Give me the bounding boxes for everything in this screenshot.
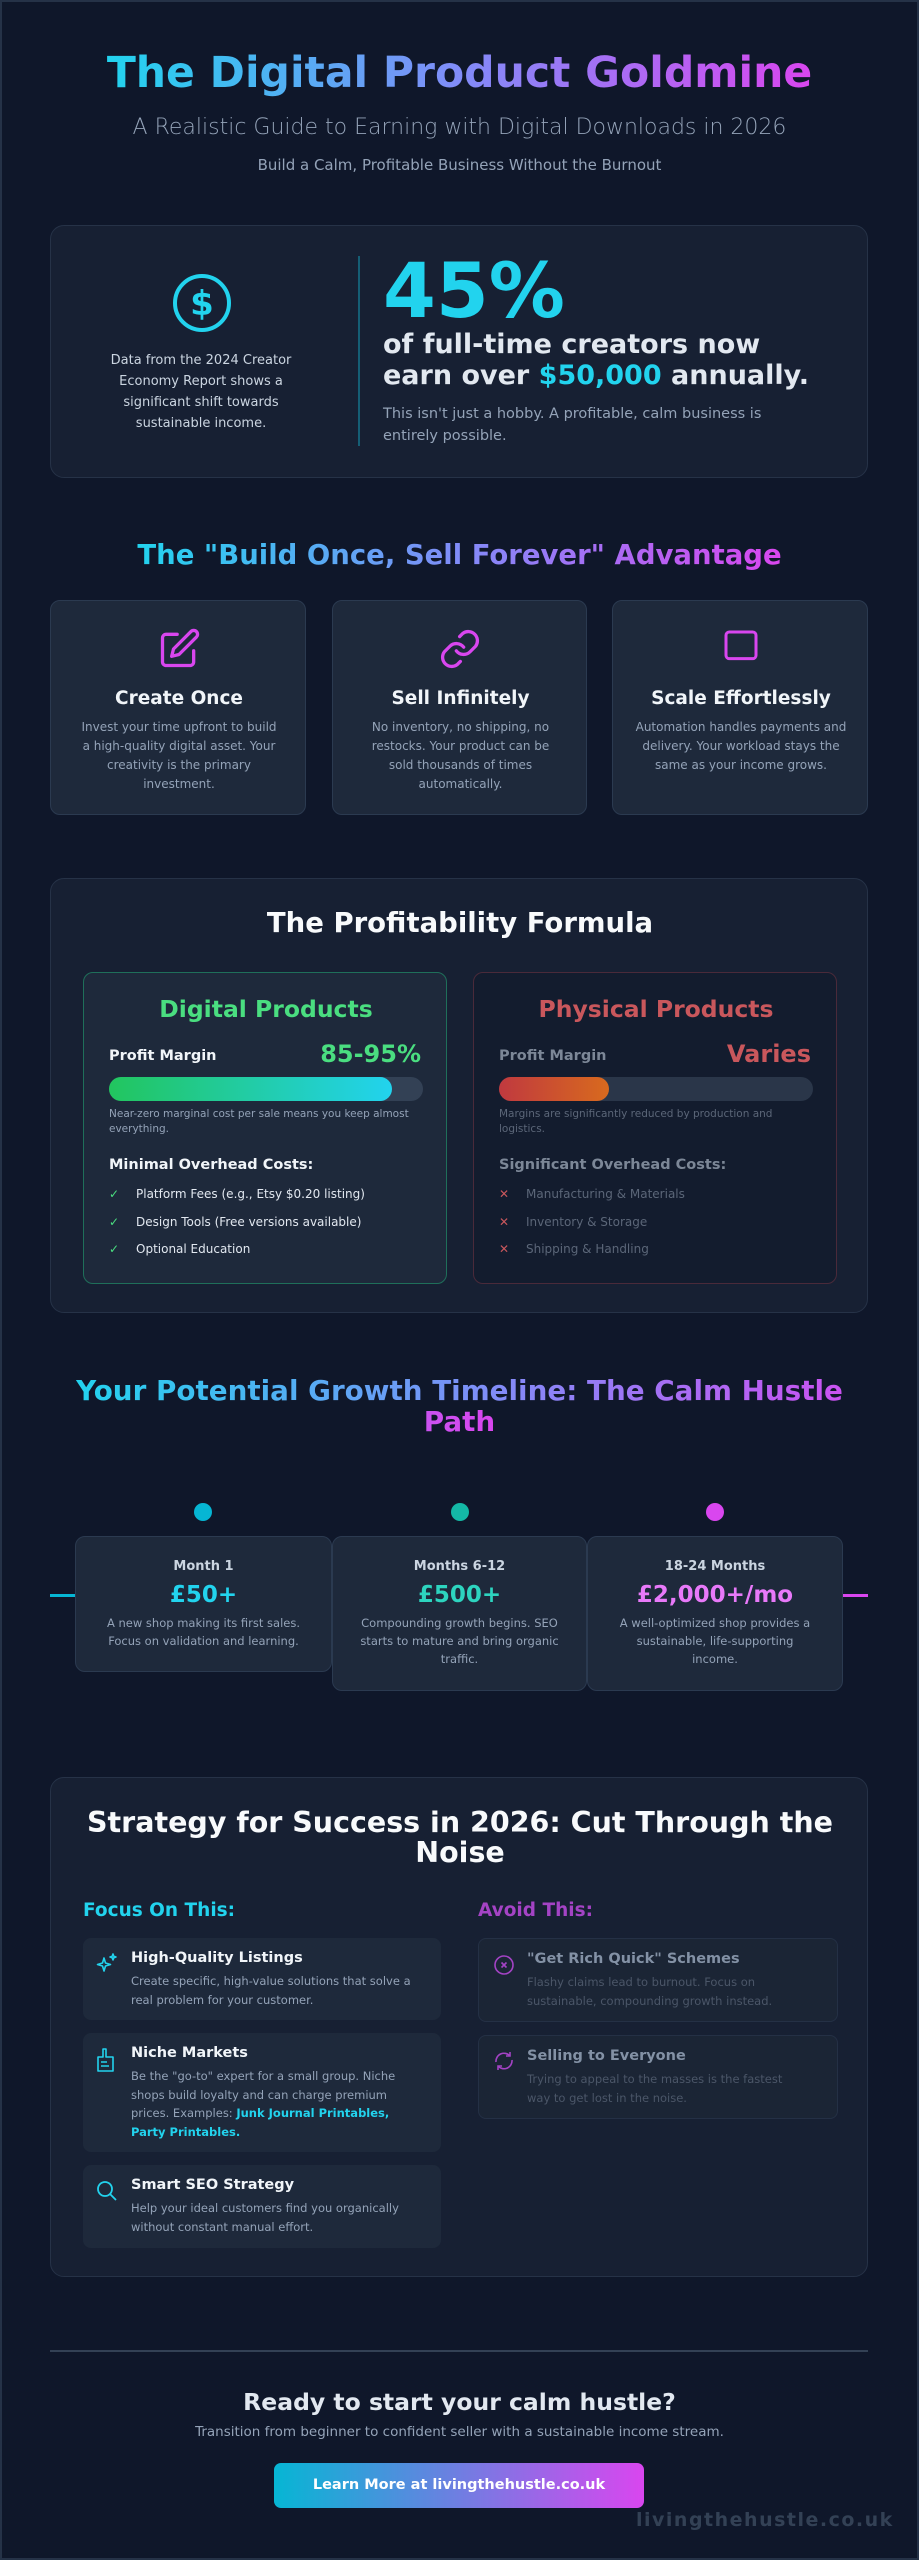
heading: Strategy for Success in 2026: Cut Through the Noise [87,1806,833,1869]
icon: window [724,630,758,660]
box: digital: Minimal Overhead Costs: [109,1157,313,1173]
card: 18-24 months [587,1536,843,1691]
card: month 1: A new shop making its first sales. Focus on validation and learning. [107,1616,300,1648]
card: create once: Create Once [115,688,243,709]
avoid card 1 [478,1938,838,2022]
box: physical: Physical Products [538,995,774,1023]
icon: search [97,2181,117,2201]
button [274,2463,644,2508]
card: 18-24 months: 18-24 Months [665,1559,765,1574]
card: 18-24 months: A well-optimized shop provides a sustainable, life-supporting income. [620,1616,810,1666]
card: scale effortlessly: Scale Effortlessly [651,688,831,709]
list [499,1187,685,1256]
bar [499,1077,813,1101]
focus card 1 [83,1938,441,2020]
bar [109,1077,423,1101]
panel: stat [50,225,868,478]
dot 2 [451,1503,469,1521]
card: months 6-12: Months 6-12 [414,1559,505,1574]
tagline: Build a Calm, Profitable Business Without the Burnout [258,156,661,174]
panel: strategy [50,1777,868,2277]
card: sell infinitely [332,600,587,815]
timeline [50,1503,868,1691]
avoid card 2: way to get lost in the noise. [527,2090,687,2104]
list: Optional Education [136,1242,250,1256]
stat note: This isn't just a hobby. A profitable, calm business is entirely possible. [383,406,761,444]
heading: timeline: Your Potential Growth Timeline: The Calm Hustle Path [76,1374,843,1438]
list: ✕ [499,1187,509,1201]
card: create once: Invest your time upfront to build a high-quality digital asset. Your creativity is the primary investment. [81,720,277,791]
icon: x circle [494,1955,514,1975]
button: Learn More at livingthehustle.co.uk [313,2477,605,2493]
icon: sparkle [96,1953,117,1972]
focus card 1: Create specific, high-value solutions that solve a real problem for your customer. [131,1974,411,2006]
card: sell infinitely: Sell Infinitely [391,688,530,709]
card: sell infinitely: No inventory, no shipping, no restocks. Your product can be sold thousands of times automatically. [372,720,549,791]
focus card 3: Smart SEO Strategy [131,2177,294,2193]
box: physical: Margins are significantly reduced by production and logistics. [499,1108,772,1135]
column heading: focus: Focus On This: [83,1900,235,1921]
focus card 2 [83,2033,441,2152]
focus card 2: shops build loyalty and can charge premium [131,2088,387,2102]
list: ✓ [109,1242,119,1256]
focus card 3 [83,2165,441,2248]
box: digital: Profit Margin [109,1048,217,1064]
focus card 2: Be the "go-to" expert for a small group. Niche [131,2069,395,2083]
card: month 1 [75,1536,332,1672]
card: 18-24 months: £2,000+/mo [637,1582,793,1608]
avoid card 2: Trying to appeal to the masses is the fastest [527,2072,782,2086]
card: months 6-12 [332,1536,587,1691]
box: physical: Significant Overhead Costs: [499,1157,726,1173]
avoid card 2: Selling to Everyone [527,2048,686,2064]
panel: profitability formula [50,878,868,1313]
box: physical [473,972,837,1284]
list: Manufacturing & Materials [526,1187,685,1201]
stat text [383,329,809,391]
dot 3 [706,1503,724,1521]
avoid card 2 [478,2035,838,2119]
watermark: livingthehustle.co.uk [636,2509,894,2531]
icon: cycle [495,2052,513,2070]
focus card 1: High-Quality Listings [131,1950,303,1966]
box: digital: Near-zero marginal cost per sale means you keep almost everything. [109,1108,409,1135]
focus card 2: prices. Examples: Junk Journal Printables, [131,2106,389,2120]
box: digital: Digital Products [159,995,373,1023]
card: scale effortlessly [612,600,868,815]
list: ✓ [109,1187,119,1201]
list [109,1187,365,1256]
icon: dollar [173,274,231,332]
list: Inventory & Storage [526,1214,647,1228]
column heading: avoid: Avoid This: [478,1900,593,1921]
list: Shipping & Handling [526,1242,649,1256]
card: month 1: Month 1 [173,1559,234,1574]
icon: thumb [97,2048,114,2072]
list: ✕ [499,1214,509,1228]
card: scale effortlessly: Automation handles payments and delivery. Your workload stays the same as your income grows. [636,720,846,772]
list: Design Tools (Free versions available) [136,1214,361,1228]
box: physical: Varies [727,1040,811,1068]
heading: build once: The "Build Once, Sell Forever" Advantage [137,539,782,571]
card: months 6-12: Compounding growth begins. SEO starts to mature and bring organic traffic. [360,1616,559,1666]
icon: link [440,630,480,668]
list: ✕ [499,1242,509,1256]
icon: dollar: $ [190,284,214,324]
card: create once [50,600,306,815]
cta heading: Ready to start your calm hustle? [243,2388,676,2416]
heading: The Profitability Formula [267,907,653,939]
stat text: of full-time creators now [383,329,760,360]
divider [50,2350,868,2352]
title: The Digital Product Goldmine [107,49,812,98]
focus card 3: Help your ideal customers find you organically without constant manual effort. [131,2201,399,2234]
list: ✓ [109,1214,119,1228]
source text: Data from the 2024 Creator Economy Report shows a significant shift towards sustainable income. [111,353,291,431]
list: Platform Fees (e.g., Etsy $0.20 listing) [136,1187,365,1201]
avoid card 1: Flashy claims lead to burnout. Focus on sustainable, compounding growth instead. [527,1975,772,2008]
divider [358,256,360,446]
cta text: Transition from beginner to confident seller with a sustainable income stream. [195,2424,724,2440]
box: digital [83,972,447,1284]
icon: pencil [160,628,200,668]
focus card 2: Party Printables. [131,2124,240,2138]
box: digital: 85-95% [320,1040,421,1068]
box: physical: Profit Margin [499,1048,607,1064]
subtitle: A Realistic Guide to Earning with Digital Downloads in 2026 [133,115,786,140]
card: months 6-12: £500+ [418,1582,501,1608]
avoid card 1: "Get Rich Quick" Schemes [527,1951,740,1967]
dot 1 [194,1503,212,1521]
stat text: earn over $50,000 annually. [383,360,809,391]
card: month 1: £50+ [170,1582,237,1608]
big stat: 45% [383,246,565,335]
focus card 2: Niche Markets [131,2045,248,2061]
